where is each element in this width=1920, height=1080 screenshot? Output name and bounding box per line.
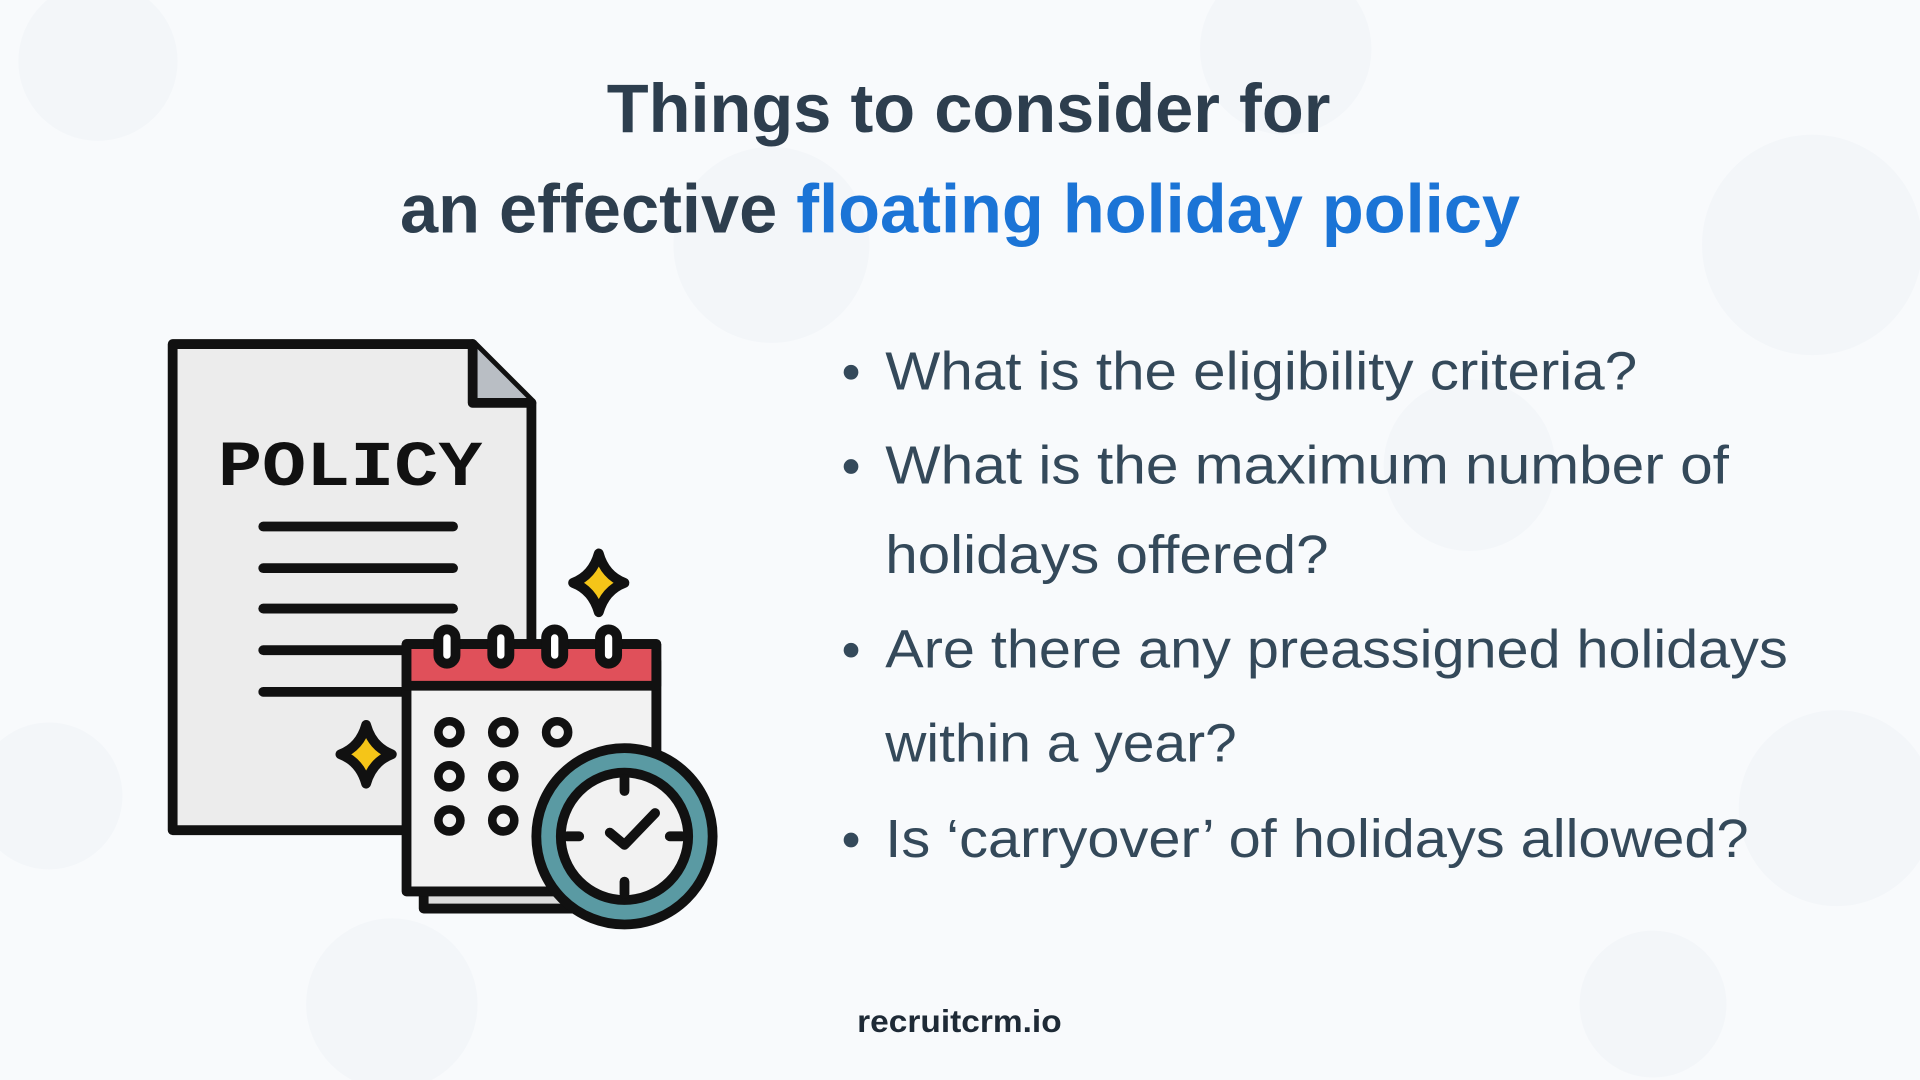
bullet list [844,341,1788,869]
title: an effective floating holiday policy [400,171,1520,248]
icon: sparkles [340,553,624,784]
footer brand: recruitcrm.io [857,1003,1062,1039]
bullet 1: What is the eligibility criteria? [885,341,1637,401]
bullet 2: What is the maximum number of [885,436,1730,496]
bullet 2: holidays offered? [885,525,1329,585]
bullet 2 [844,436,1730,585]
icon: calendar [407,629,656,909]
title [400,70,1520,248]
bullet 3: within a year? [884,714,1237,774]
title: Things to consider for [607,70,1330,147]
icon: policy document [173,344,531,830]
illustration: policy document with calendar and clock [173,344,713,924]
bullet 4: Is ‘carryover’ of holidays allowed? [885,809,1749,869]
icon: policy document: POLICY [218,433,483,505]
bullet 3: Are there any preassigned holidays [885,619,1788,679]
bullet 3 [844,619,1788,774]
icon: clock [536,748,713,924]
